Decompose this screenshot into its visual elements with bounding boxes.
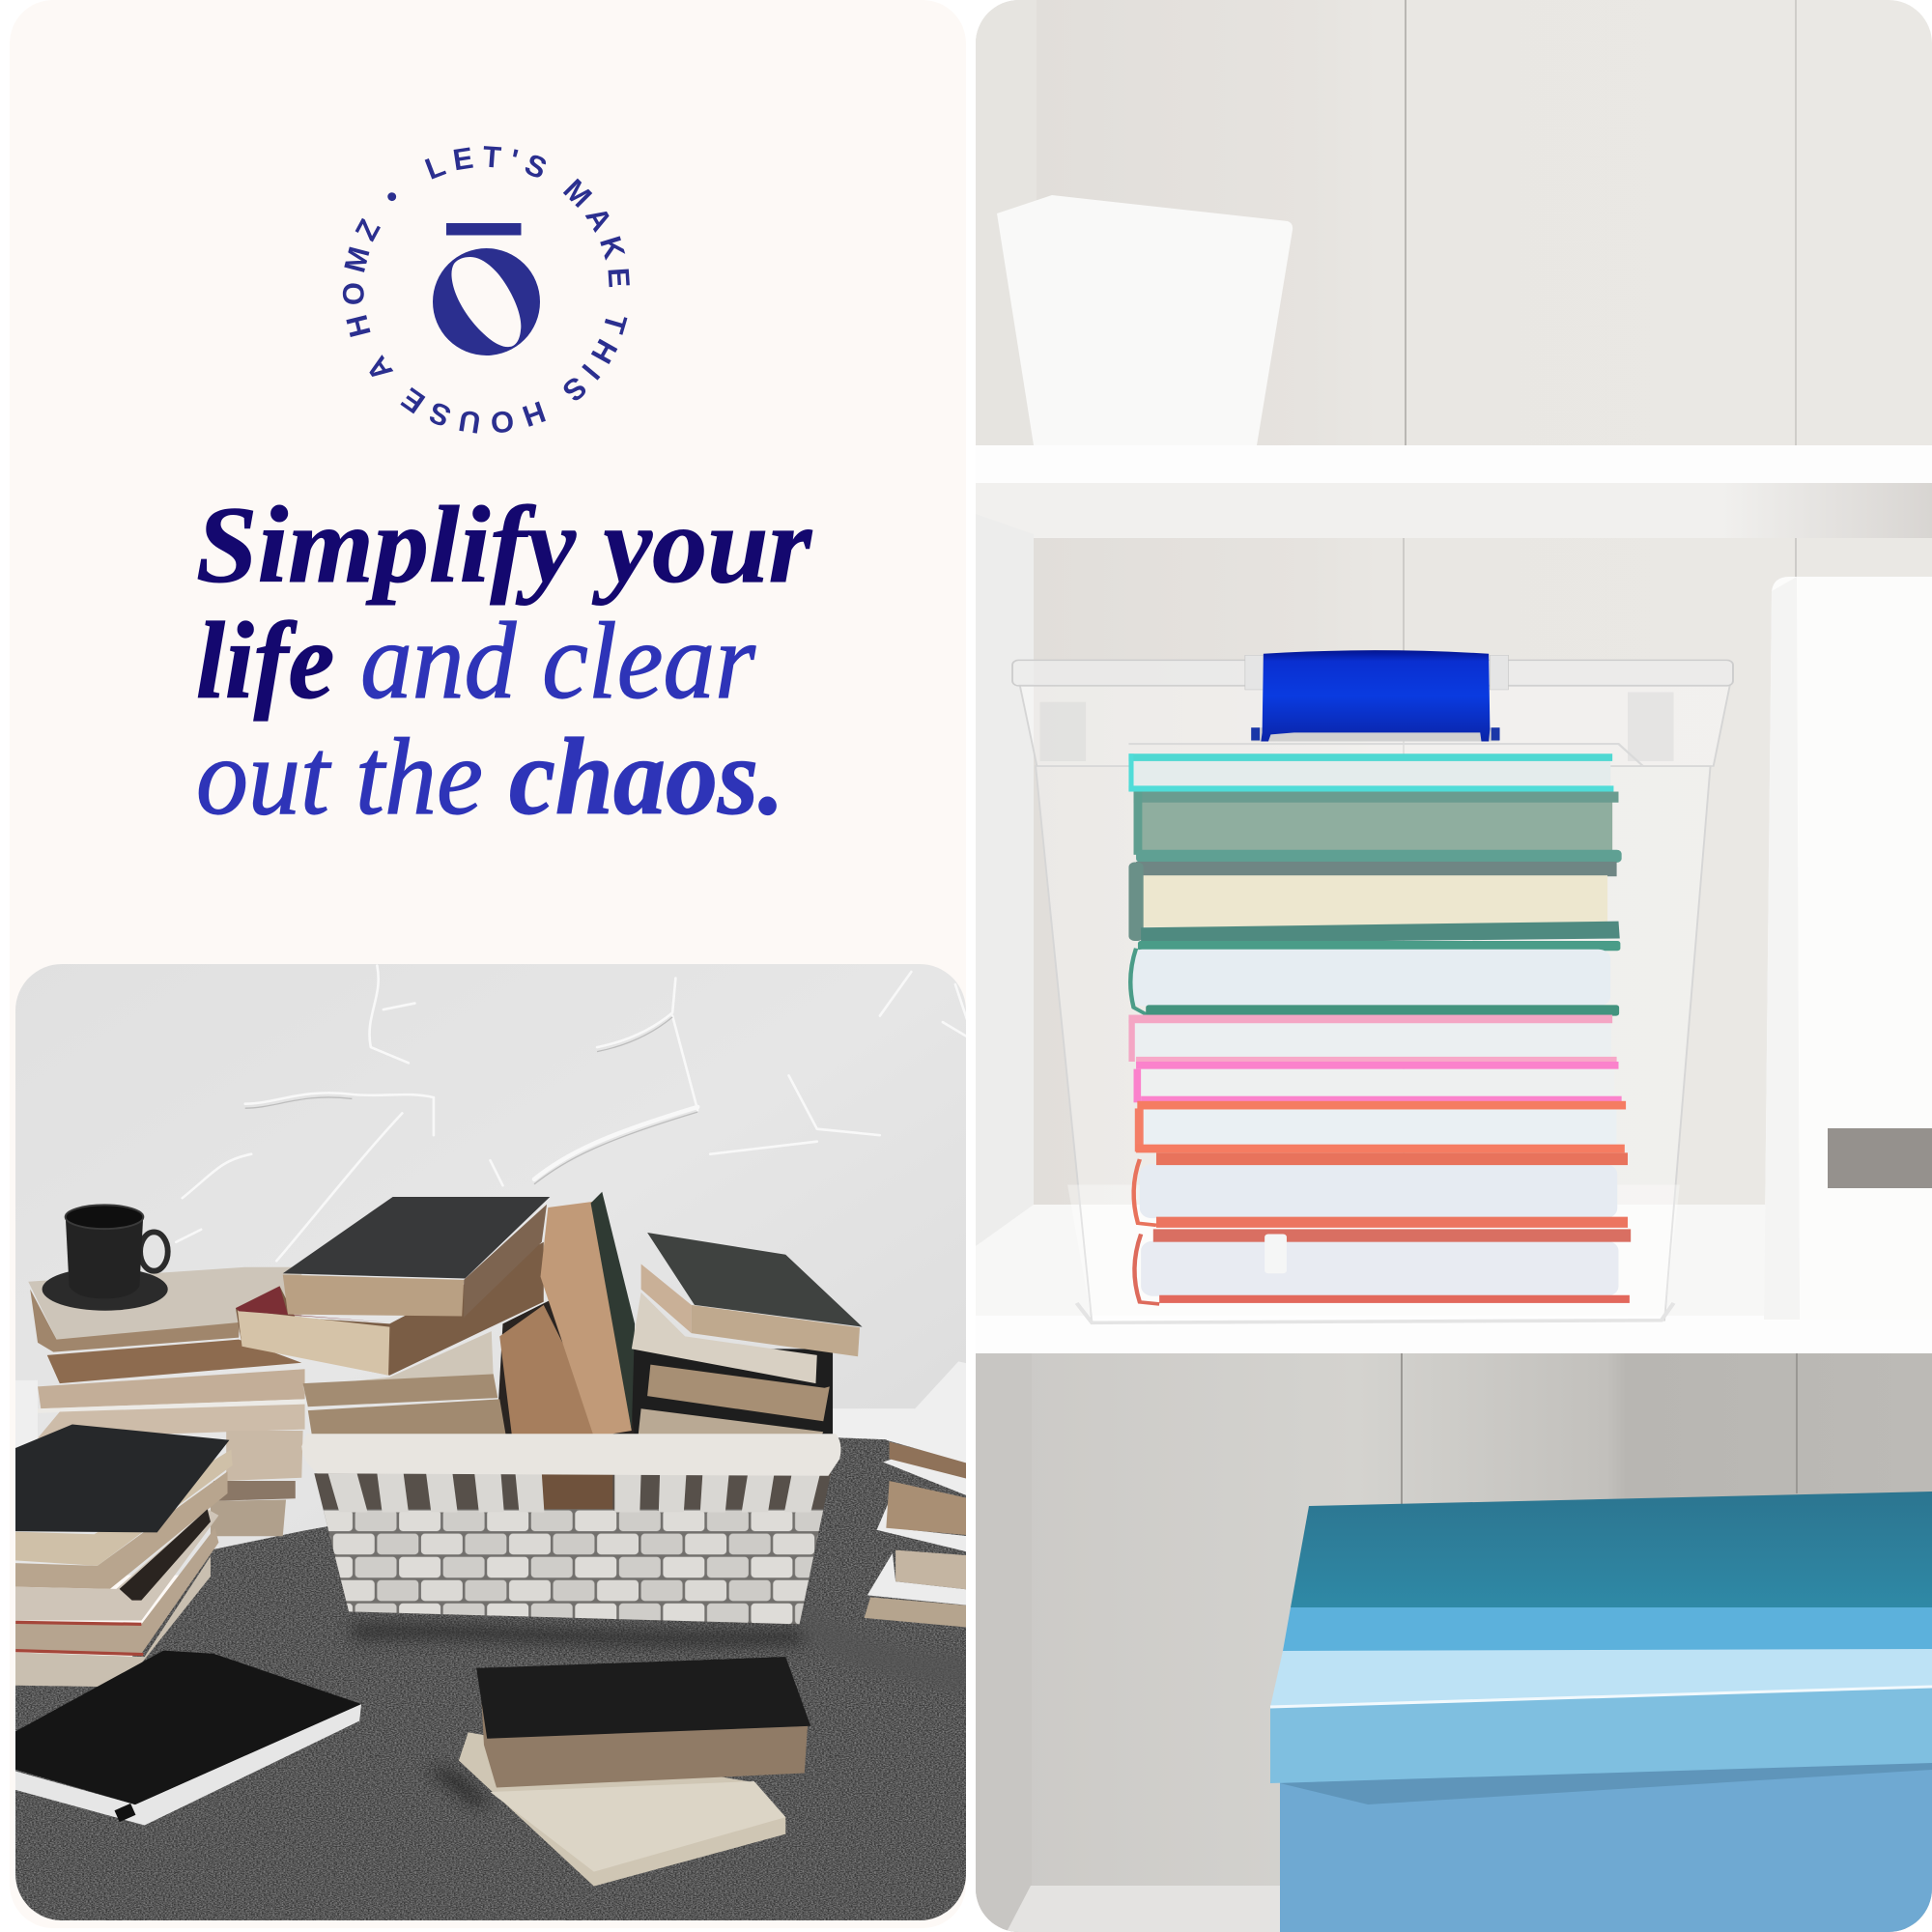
back stack of books — [28, 1267, 305, 1536]
box label slot — [1828, 1128, 1932, 1188]
panel: cream text card — [10, 0, 966, 1928]
shelf board: upper — [976, 445, 1932, 539]
white vase — [997, 195, 1293, 445]
heading line 3: out the chaos. — [196, 717, 784, 838]
basket body — [314, 1473, 831, 1624]
logo: circular badge — [342, 146, 630, 434]
shelf compartment: top — [976, 0, 1932, 449]
blue storage box — [1270, 1492, 1932, 1932]
black notebook — [0, 1651, 361, 1826]
book: red-orange — [1134, 1152, 1628, 1228]
book: dark green with cream pages — [1128, 850, 1622, 944]
clear storage bin with books — [1012, 650, 1733, 1322]
book: teal — [1128, 753, 1613, 792]
heading line 1: Simplify your — [196, 485, 812, 606]
shelf compartment: middle — [976, 514, 1932, 1246]
cream book on blanket — [459, 1732, 785, 1887]
heading: Simplify your life and clear out the chaos. — [196, 485, 812, 838]
bin lid rim — [1012, 660, 1733, 686]
book: red with ribbon — [1134, 1229, 1631, 1304]
basket rim — [301, 1434, 841, 1476]
visible book behind weave — [541, 1473, 612, 1511]
book: bright pink — [1134, 1062, 1622, 1102]
black hardback on blanket — [476, 1657, 810, 1788]
box lid front — [1270, 1687, 1932, 1783]
bin shell — [1012, 660, 1733, 1322]
logo mark: o with macron — [433, 223, 540, 355]
box lid top — [1291, 1492, 1932, 1607]
logo ring text: LET'S MAKE THIS HOUSE A HOMZ • — [342, 146, 630, 434]
book: green with pale pages — [1130, 941, 1620, 1016]
book: sage green — [1134, 792, 1618, 855]
icon: black coffee cup and saucer — [43, 1205, 168, 1311]
panel: photo of messy books and basket — [0, 947, 980, 1927]
white file box — [1764, 577, 1932, 1320]
plaster wall — [0, 947, 980, 1576]
front stack of books — [0, 1424, 233, 1687]
book: soft pink — [1128, 1015, 1617, 1065]
shelf compartment: bottom — [976, 1353, 1932, 1932]
dark woven blanket — [0, 1436, 980, 1927]
panel: shelving photo with clear storage bin — [976, 0, 1932, 1932]
box body — [1280, 1758, 1932, 1932]
heading line 2: life and clear — [196, 601, 756, 722]
wicker basket — [301, 1434, 841, 1629]
blanket folds — [352, 1601, 980, 1807]
white books on the right — [864, 1362, 966, 1627]
bin blue handle — [1245, 650, 1508, 742]
weave — [308, 1473, 836, 1629]
shelf surface — [976, 1205, 1765, 1316]
book: coral — [1135, 1101, 1626, 1152]
books overflowing the basket — [236, 1192, 863, 1440]
